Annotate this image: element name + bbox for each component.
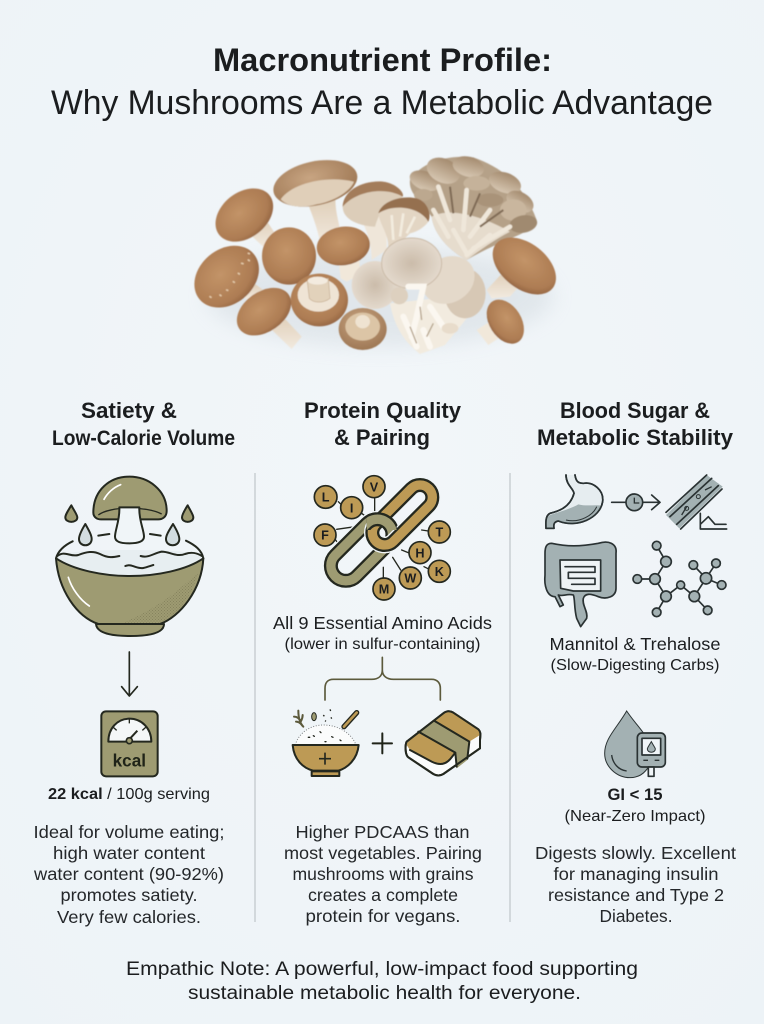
stat: 22 kcal per serving: 22 kcal / 100g serving <box>48 786 210 803</box>
amino acid letter badges: F <box>321 529 329 543</box>
title: Why Mushrooms Are a Metabolic Advantage <box>51 84 713 122</box>
caption: mannitol and trehalose <box>550 634 720 674</box>
footer note: Empathic Note: A powerful, low-impact food supporting <box>126 959 638 980</box>
amino acid letter badges: K <box>435 565 445 579</box>
title <box>51 42 713 122</box>
column heading: protein <box>304 398 462 450</box>
icon: clock arrow <box>612 494 660 511</box>
amino acid letter badges: M <box>379 583 389 597</box>
icon: molecule <box>633 541 726 617</box>
text block: blood sugar description <box>535 843 736 926</box>
oyster caps, tan <box>343 181 430 260</box>
text block: satiety description <box>33 822 224 927</box>
plus sign <box>373 733 392 753</box>
text block: protein description: mushrooms with grains <box>292 864 474 884</box>
column heading: satiety: Low-Calorie Volume <box>52 427 235 450</box>
column heading: blood sugar: Blood Sugar & <box>560 398 710 423</box>
mushroom photo cluster <box>182 152 567 354</box>
icon: blood drop and glucose meter <box>605 711 665 778</box>
oyster cluster <box>352 238 486 354</box>
icon: intestines <box>545 542 616 627</box>
amino acid letter badges: T <box>435 526 443 540</box>
text block: blood sugar description: for managing insulin <box>554 864 718 884</box>
column heading: blood sugar: Metabolic Stability <box>537 425 734 450</box>
footer note <box>126 959 638 1004</box>
top-left brown mushroom <box>205 177 284 253</box>
column heading: protein: & Pairing <box>334 425 430 450</box>
icon: stomach <box>546 475 603 528</box>
amino acid letter badges: I <box>350 501 353 515</box>
text block: satiety description: Very few calories. <box>57 907 201 927</box>
icon: mushroom in bowl <box>56 477 203 636</box>
small right mushroom <box>477 293 532 350</box>
bracket <box>325 657 440 700</box>
icon: kcal scale <box>101 711 158 776</box>
upturned button mushroom <box>291 274 348 326</box>
text block: blood sugar description: Diabetes. <box>600 906 672 926</box>
text block: satiety description: promotes satiety. <box>60 885 198 905</box>
amino acid letter badges <box>314 476 450 600</box>
amino acid letter badges: W <box>404 572 416 586</box>
title: Macronutrient Profile: <box>213 42 552 78</box>
stat: glycemic index <box>564 785 706 825</box>
icon: tofu block <box>406 711 480 775</box>
right brown mushroom <box>482 226 567 306</box>
column heading: satiety <box>52 398 235 450</box>
text block: protein description: Higher PDCAAS than <box>296 822 470 842</box>
caption: mannitol and trehalose: (Slow-Digesting Carbs) <box>550 657 720 674</box>
lower left mushroom <box>228 278 302 349</box>
column heading: satiety: Satiety & <box>81 398 177 423</box>
text block: protein description: creates a complete <box>308 885 458 905</box>
large pale-stem mushroom <box>269 153 362 245</box>
maitake mushroom <box>407 152 539 260</box>
icon: grain bowl <box>293 709 359 776</box>
text block: protein description: most vegetables. Pairing <box>284 843 482 863</box>
column heading: blood sugar <box>537 398 734 450</box>
round brown cap <box>262 227 316 285</box>
caption: mannitol and trehalose: Mannitol & Trehalose <box>550 634 720 654</box>
amino acid letter badges: V <box>370 480 379 494</box>
column heading: protein: Protein Quality <box>304 398 462 423</box>
icon: kcal scale: kcal <box>113 751 146 771</box>
text block: blood sugar description: Digests slowly. Excellent <box>535 843 736 863</box>
small upturned button <box>339 308 387 350</box>
text block: protein description: protein for vegans. <box>306 906 460 926</box>
stat: glycemic index: (Near-Zero Impact) <box>564 808 706 825</box>
icon: amino acid chain <box>314 476 450 600</box>
footer note: sustainable metabolic health for everyone. <box>188 983 581 1004</box>
amino acid letter badges: L <box>322 491 330 505</box>
text block: satiety description: Ideal for volume eating; <box>34 822 224 842</box>
amino acid letter badges: H <box>415 546 425 560</box>
text block: blood sugar description: resistance and Type 2 <box>548 885 724 905</box>
caption: essential amino acids: (lower in sulfur-containing) <box>284 636 480 653</box>
front brown mushroom <box>314 223 372 282</box>
text block: satiety description: high water content <box>53 843 205 863</box>
stat: glycemic index: GI < 15 <box>608 785 662 804</box>
left speckled mushroom <box>182 233 271 320</box>
arrow: bowl to kcal <box>122 652 137 696</box>
icon: blood vessel with graph <box>666 475 727 529</box>
caption: essential amino acids <box>273 613 492 653</box>
text block: satiety description: water content (90-92%) <box>33 864 224 884</box>
text block: protein description <box>284 822 482 926</box>
caption: essential amino acids: All 9 Essential Amino Acids <box>273 613 492 633</box>
